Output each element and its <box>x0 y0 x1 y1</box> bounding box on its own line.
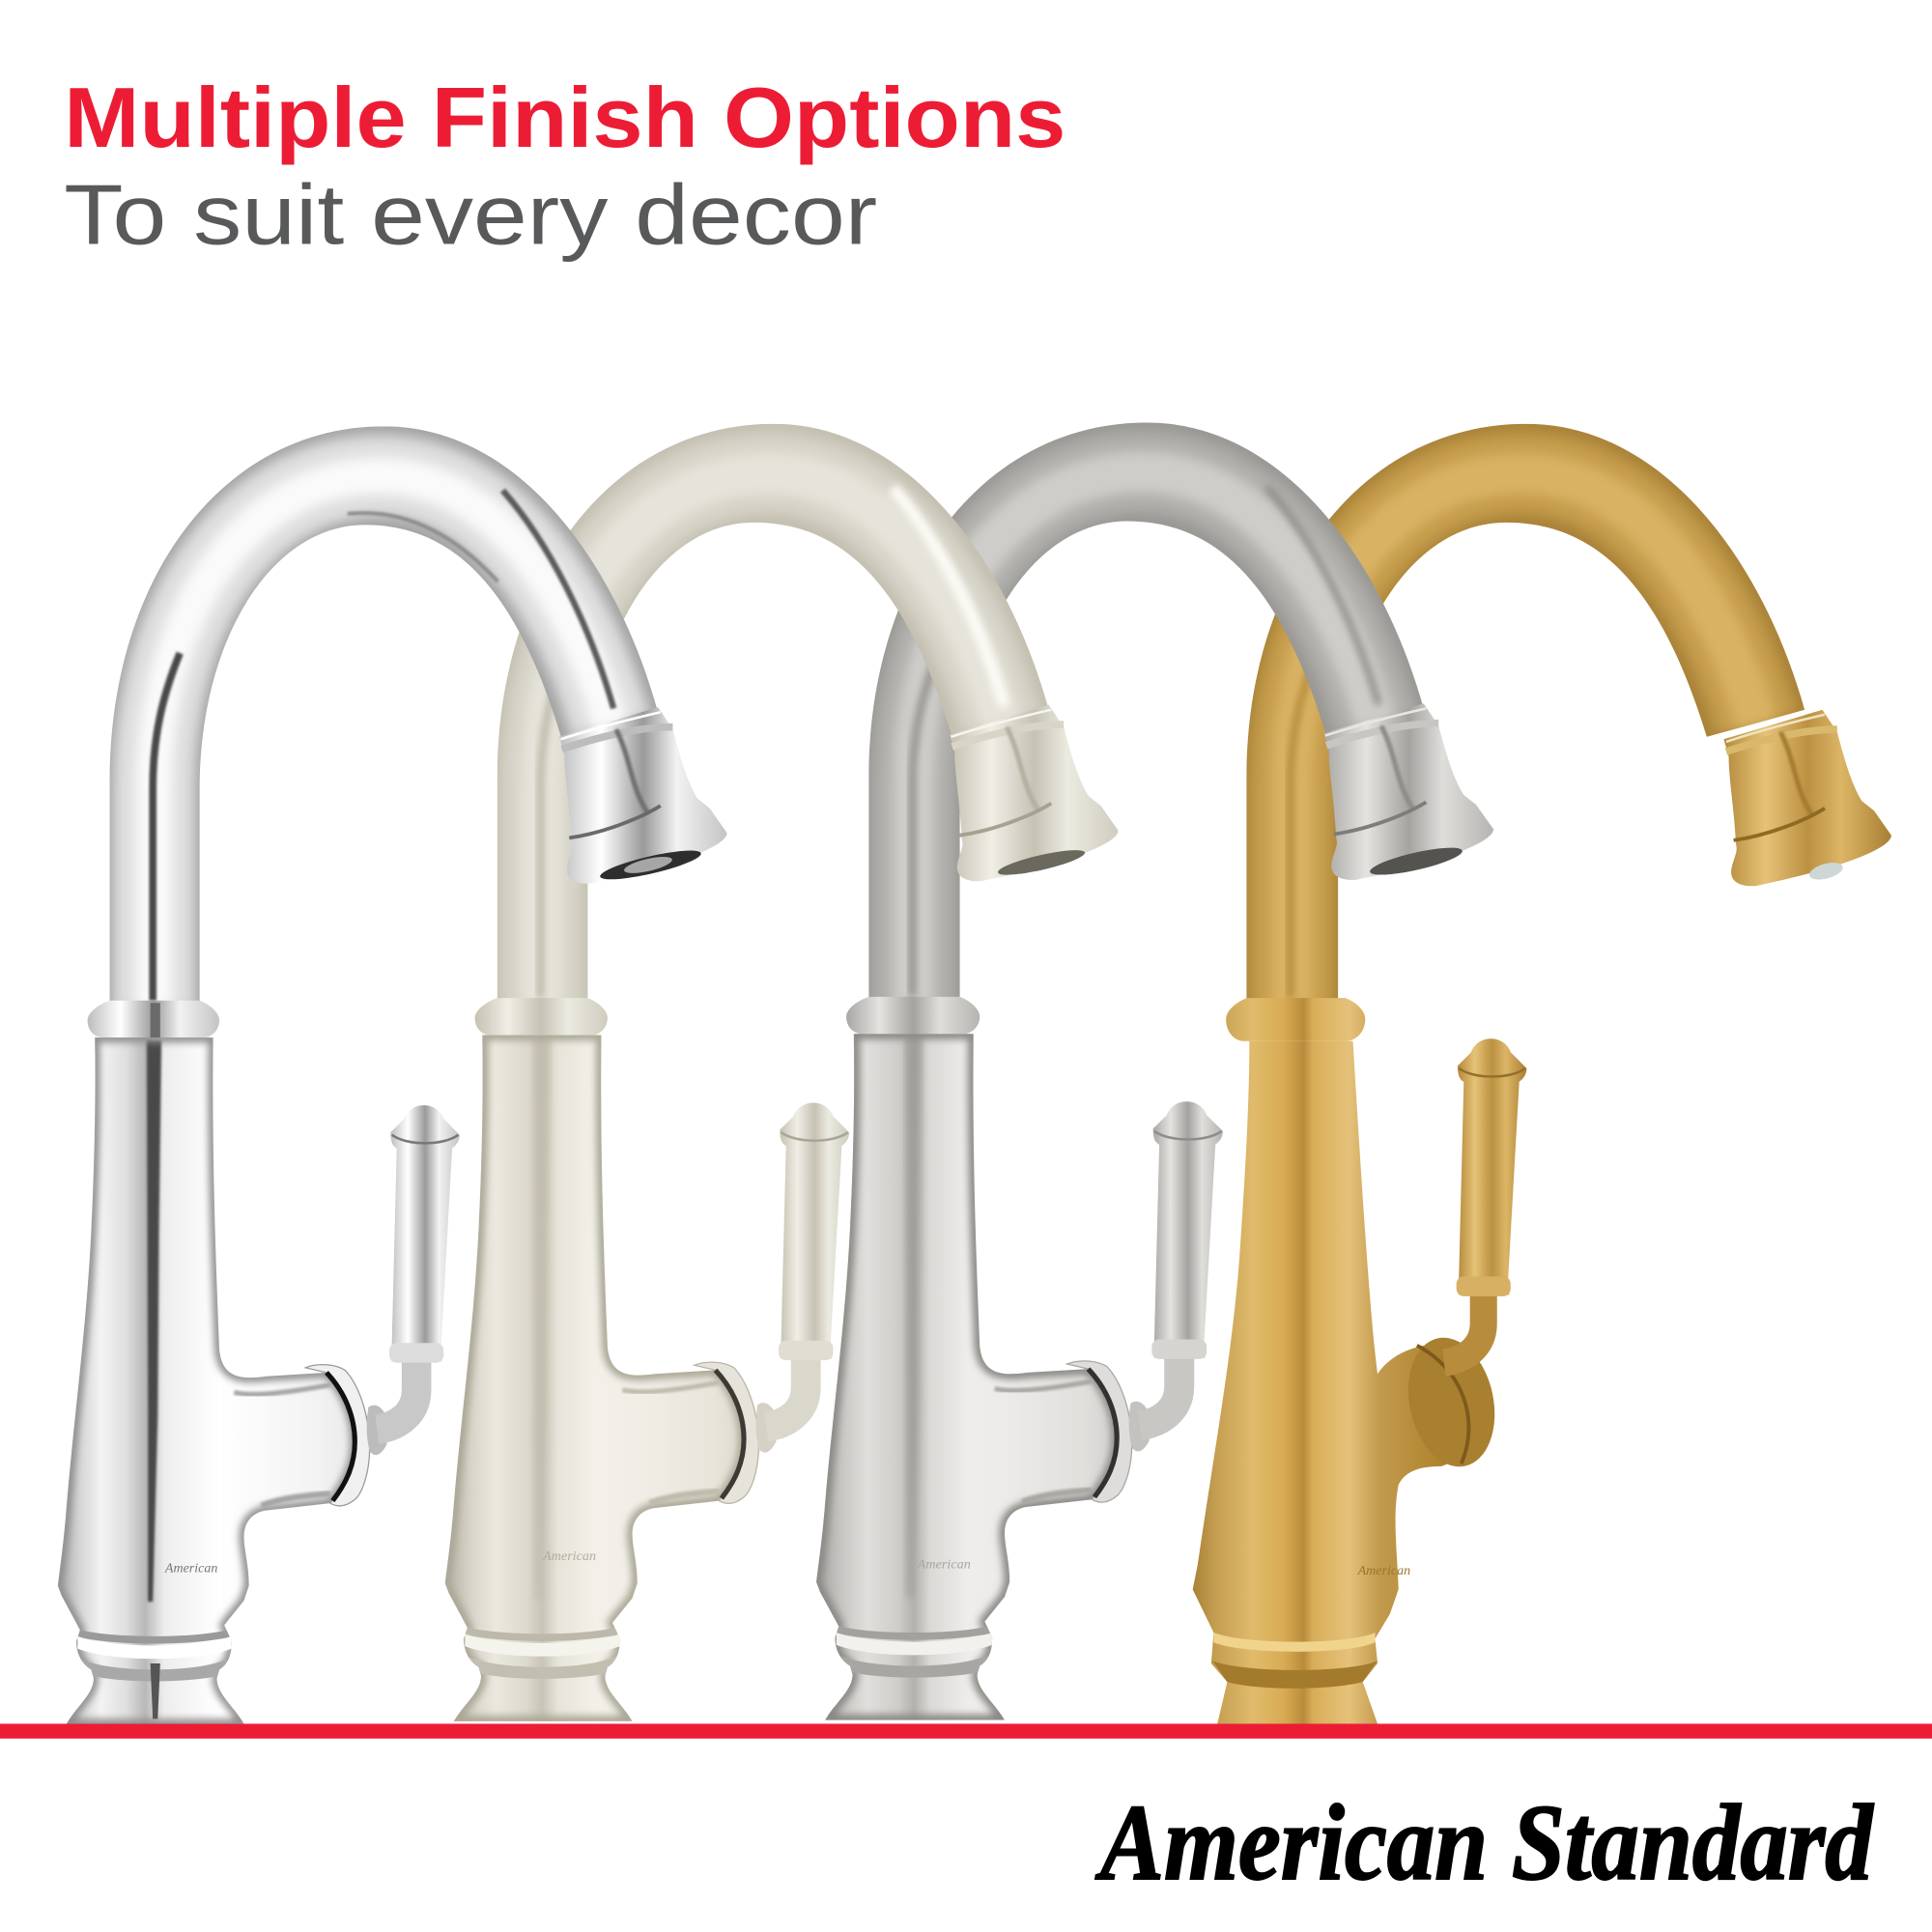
gold collar <box>1226 998 1365 1041</box>
gold handle <box>1444 1038 1526 1363</box>
gold body <box>1193 1041 1472 1723</box>
nickel ring <box>695 1362 758 1503</box>
gold spout head <box>1723 710 1891 886</box>
nickel spout <box>541 473 1005 1008</box>
title: Multiple Finish Options <box>64 70 1065 165</box>
gold arm ring highlight <box>1417 1346 1468 1463</box>
red divider bar <box>0 1723 1932 1739</box>
stainless body <box>816 997 1117 1720</box>
stainless logo mark: American <box>917 1557 971 1573</box>
faucet: polished nickel finish <box>445 473 1119 1721</box>
nickel logo mark: American <box>542 1548 596 1564</box>
stainless spout <box>912 472 1378 1007</box>
gold spout <box>1291 473 1757 1008</box>
faucet: brushed gold finish <box>1193 473 1891 1723</box>
chrome spout head <box>559 707 727 885</box>
faucet: polished chrome finish <box>58 475 727 1723</box>
stainless spout head <box>1323 703 1493 880</box>
gold arm end cap <box>1397 1329 1506 1475</box>
nickel body <box>445 998 744 1721</box>
nickel spout head <box>950 705 1119 881</box>
faucet: brushed stainless finish <box>816 472 1493 1720</box>
subtitle: To suit every decor <box>64 167 877 263</box>
stainless handle <box>1129 1101 1223 1451</box>
chrome handle <box>367 1105 460 1455</box>
chrome body <box>58 1001 355 1723</box>
chrome logo mark: American <box>164 1561 217 1577</box>
chrome spout <box>153 475 613 1010</box>
stainless ring <box>1067 1361 1132 1502</box>
gold base rings <box>1212 1633 1378 1689</box>
nickel handle <box>755 1103 849 1453</box>
chrome ring <box>305 1365 370 1506</box>
gold logo mark: American <box>1357 1563 1410 1578</box>
